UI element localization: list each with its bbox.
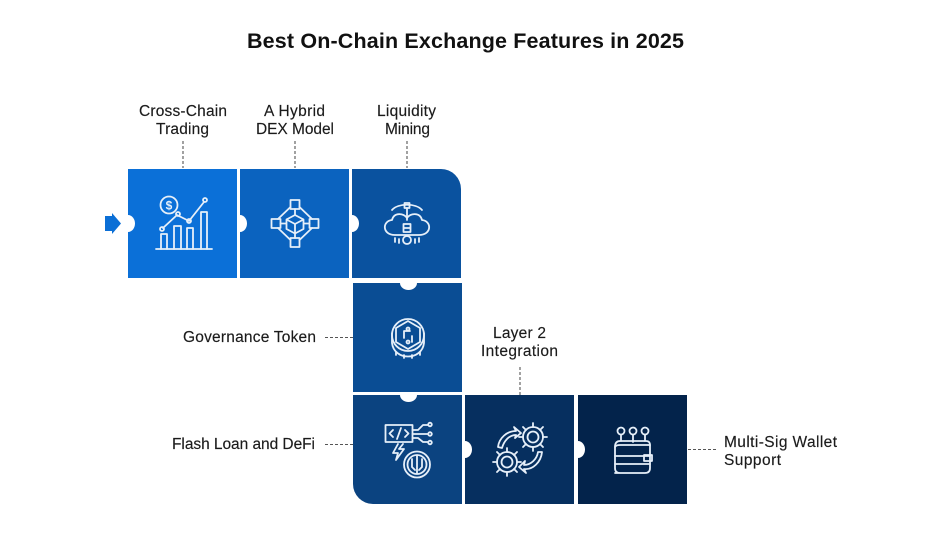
icon: wallet bbox=[615, 428, 652, 473]
label: hybrid DEX model bbox=[256, 103, 334, 168]
label: multi-sig wallet support bbox=[688, 434, 838, 469]
panel: layer 2 integration bbox=[465, 395, 574, 504]
label: governance token: Governance Token bbox=[183, 329, 316, 346]
label: layer 2 integration: Integration bbox=[481, 343, 558, 360]
panel: governance token bbox=[353, 283, 462, 392]
label: cross-chain trading: Trading bbox=[156, 121, 209, 138]
panel: liquidity mining bbox=[352, 169, 461, 278]
icon: gears and arrows bbox=[493, 423, 547, 476]
label: flash loan and DeFi: Flash Loan and DeFi bbox=[172, 436, 315, 453]
title: Best On-Chain Exchange Features in 2025 bbox=[247, 29, 684, 53]
label: multi-sig wallet support: Support bbox=[724, 452, 782, 469]
icon: start arrow bbox=[105, 213, 121, 234]
label: cross-chain trading: Cross-Chain bbox=[139, 103, 227, 120]
icon: token coin bbox=[392, 319, 424, 358]
label: liquidity mining bbox=[377, 103, 436, 168]
label: multi-sig wallet support: Multi-Sig Wallet bbox=[724, 434, 838, 451]
icon: mining cloud bbox=[385, 203, 429, 244]
label: hybrid DEX model: A Hybrid bbox=[264, 103, 325, 120]
icon: growth chart: $ bbox=[166, 198, 173, 212]
panel: cross-chain trading bbox=[128, 169, 237, 278]
icon: code chip and coin bbox=[386, 423, 432, 478]
label: liquidity mining: Mining bbox=[385, 121, 430, 138]
icon: cube network bbox=[272, 200, 318, 247]
panel: flash loan and DeFi bbox=[353, 395, 462, 504]
label: cross-chain trading bbox=[139, 103, 227, 168]
panel: multi-sig wallet support bbox=[578, 395, 687, 504]
panel: hybrid DEX model bbox=[240, 169, 349, 278]
label: layer 2 integration: Layer 2 bbox=[493, 325, 546, 342]
label: hybrid DEX model: DEX Model bbox=[256, 121, 334, 138]
label: liquidity mining: Liquidity bbox=[377, 103, 436, 120]
label: layer 2 integration bbox=[481, 325, 558, 395]
